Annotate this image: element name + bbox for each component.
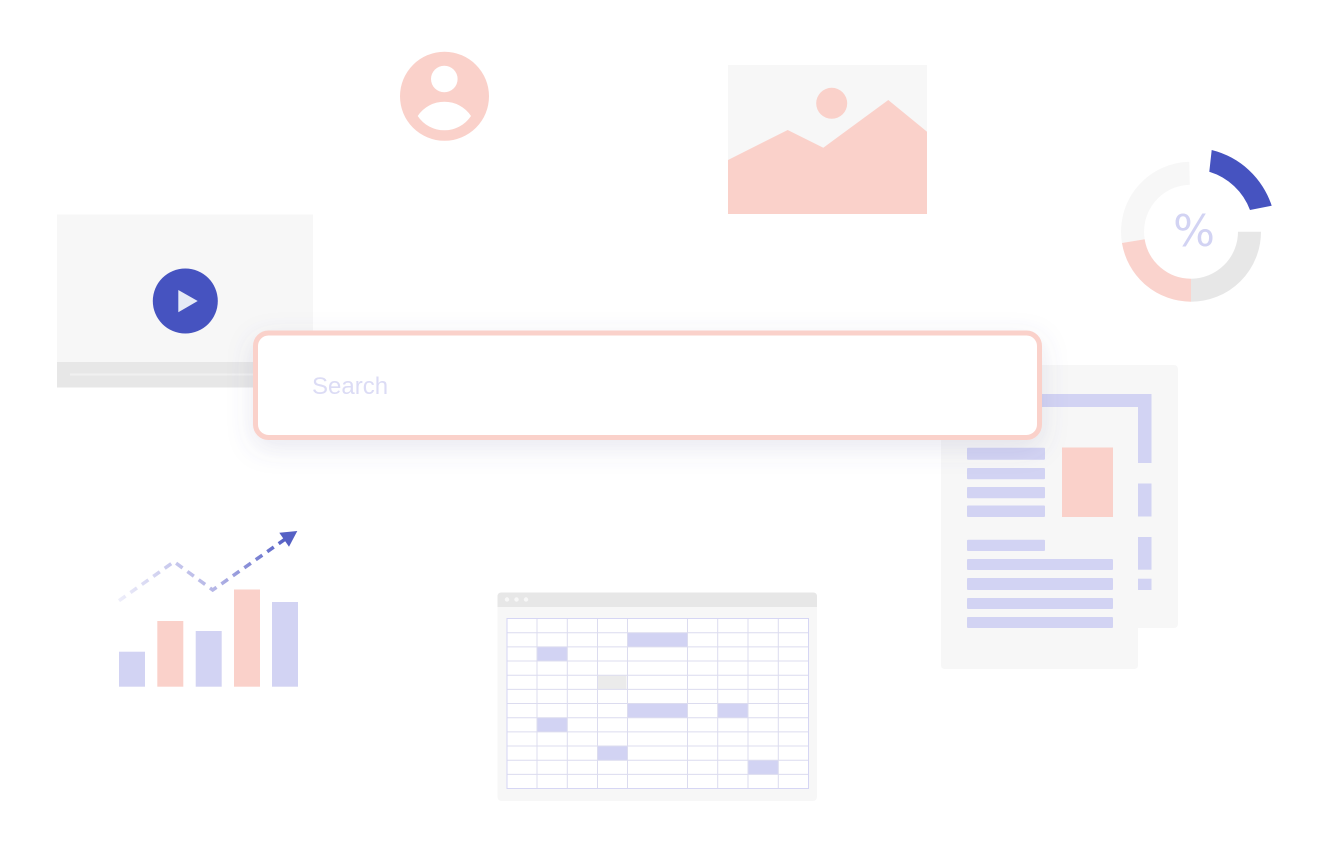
search placeholder text: Search: [312, 373, 388, 400]
document text lines: [967, 448, 1113, 628]
arrow head: [279, 531, 297, 547]
bar chart with trend arrow: [119, 531, 298, 687]
donut chart with percent: %: [1173, 206, 1215, 257]
search box: [256, 333, 1040, 438]
highlighted cells: [537, 633, 778, 774]
panel: video player: [57, 214, 313, 388]
icon: user avatar: [400, 52, 489, 141]
donut chart with percent: [1133, 150, 1272, 290]
panel: spreadsheet window: [498, 592, 817, 801]
icon: play button: [153, 268, 218, 334]
window buttons: [505, 597, 528, 602]
panel: back and front documents: [941, 365, 1178, 669]
icon: image placeholder: [728, 65, 927, 214]
table cells: [507, 618, 808, 788]
document picture block: [1062, 448, 1113, 517]
table grid: [507, 618, 808, 788]
trend line: [119, 538, 286, 601]
